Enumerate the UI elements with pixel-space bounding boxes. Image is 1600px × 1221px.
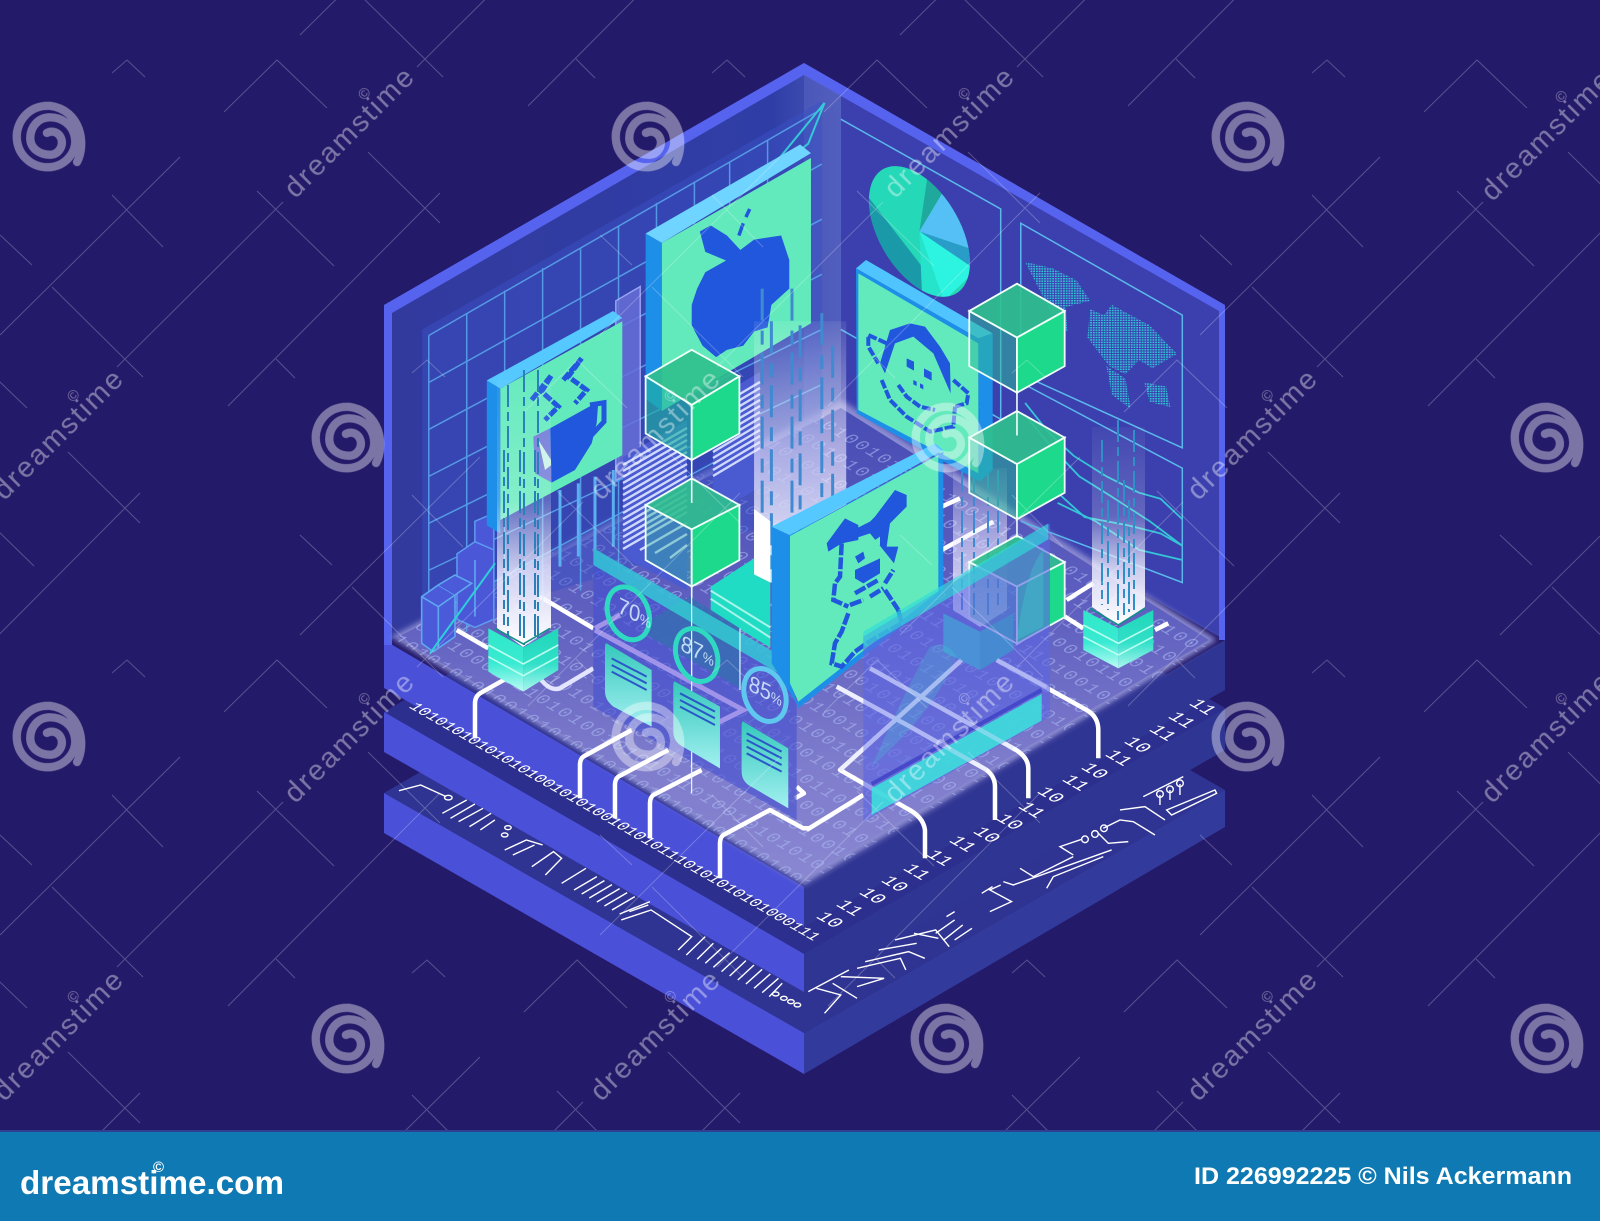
wall rim	[384, 63, 1225, 645]
floor binary text	[398, 415, 1206, 885]
floor binary text: 0100101001010100101101001010010101001010	[650, 477, 1106, 751]
layer: binary slab	[384, 465, 1225, 992]
right data pillar	[1092, 420, 1145, 625]
monkey screen	[856, 260, 993, 482]
binary text on slab right strip: 11	[920, 847, 959, 869]
gauge labels: 85%	[747, 670, 785, 712]
floor binary text: 1010100101011010010101001010101101001010	[474, 581, 930, 855]
icon: apple	[692, 209, 789, 357]
floor binary text: 0101010010101101001010010101010010110101	[562, 529, 1018, 803]
floor binary text: 1001010100101001010110100101010010101001	[584, 516, 1040, 790]
cube right middle	[969, 411, 1065, 519]
floor binary text: 0110100101001010100101101001010100101001	[738, 425, 1194, 699]
binary text on slab right strip: 11	[1162, 709, 1201, 731]
binary text on slab right strip: 10	[967, 824, 1006, 846]
binary text on slab right strip: 11	[1099, 747, 1138, 769]
binary text on slab right strip: 11	[1056, 772, 1095, 794]
binary text on slab right strip: 10	[810, 909, 849, 931]
cube right lower	[969, 536, 1065, 644]
left glass panel	[593, 548, 797, 820]
stair bar chart upper	[457, 513, 494, 627]
footer logo mark: ©	[153, 1159, 164, 1176]
binary text on slab right strip	[810, 696, 1222, 931]
gauge labels	[616, 592, 785, 712]
watermark spirals	[17, 106, 1579, 1069]
stair box bar	[422, 560, 495, 653]
layer: circuit slab	[384, 550, 1225, 1074]
right wall	[804, 63, 1225, 640]
icon: coffee cup	[532, 358, 604, 483]
apple data pillar	[754, 289, 846, 582]
binary text on slab right strip: 10	[1118, 734, 1157, 756]
coffee data pillar	[497, 370, 551, 647]
floor binary text: 1010010101101001010010101100101001010100	[760, 412, 1216, 686]
corner band	[804, 75, 841, 440]
cube right top	[969, 284, 1065, 393]
apple screen	[646, 144, 811, 411]
floor binary text: 0010101001101001010100101010011010010101	[694, 451, 1150, 725]
gauge labels: 87%	[679, 630, 717, 672]
gauge rings	[600, 580, 794, 728]
icon: monkey	[868, 323, 968, 432]
world map	[1025, 262, 1177, 409]
white pipes on floor, right side	[807, 498, 1168, 858]
binary text on slab right strip: 11	[943, 833, 982, 855]
floor binary text: 0010100101010110100101001010100101101010	[606, 503, 1062, 777]
cube connector lines	[692, 393, 1017, 685]
right glass panel	[837, 523, 1050, 822]
footer bar	[0, 1130, 1600, 1221]
circuit traces right lower	[808, 885, 1012, 1013]
binary text on slab right strip: 10	[875, 873, 914, 895]
floor binary text: 0010100101010110010100101010011010100101	[782, 399, 1238, 673]
floor binary text: 1010110100101010010100101011010010100101	[628, 490, 1084, 764]
monkey pillar base	[943, 613, 1013, 670]
layer: floor slab	[384, 640, 1225, 927]
left wall	[384, 63, 841, 640]
floor binary text: 0010101001010100101101010010101001010100	[452, 594, 908, 868]
floor	[391, 400, 1217, 885]
line charts	[1025, 403, 1182, 560]
isometric scene	[384, 63, 1238, 1074]
central teal base	[711, 509, 770, 648]
right pillar base	[1083, 608, 1153, 668]
back bar chart stripes	[560, 470, 613, 567]
tall column behind screens	[616, 287, 640, 480]
pie chart	[868, 166, 970, 297]
document cards	[605, 643, 788, 808]
left wall grid panel	[422, 101, 825, 648]
binary text on slab right strip: 11	[897, 861, 936, 883]
binary text on slab right strip: 10	[1075, 760, 1114, 782]
icon: dog	[827, 490, 907, 667]
cube left upper	[646, 350, 739, 460]
coffee pillar base	[488, 628, 558, 692]
binary text on slab left strip: 1010101010101010010101001010101110101010101000111	[404, 700, 825, 944]
binary text on slab right strip: 11	[830, 897, 869, 919]
zoom-1 coordinate layer: walls and objects	[422, 101, 1182, 648]
cube left lower	[646, 478, 739, 587]
zoom-1 coordinate layer: cubes	[646, 284, 1065, 685]
white pipes on floor, left side	[457, 597, 810, 878]
monkey data pillar	[953, 468, 1007, 627]
footer credit: ID 226992225 © Nils Ackermann	[1194, 1163, 1572, 1190]
right wall panels	[841, 119, 1182, 582]
dog screen	[772, 443, 943, 708]
footer logo: dreamstime.com	[20, 1164, 284, 1201]
floor binary text: 0100101010010101001010110100101010010101	[496, 568, 952, 842]
binary text on slab right strip: 11	[1012, 799, 1051, 821]
binary text on slab right strip: 11	[1143, 722, 1182, 744]
floor binary text: 1011010010100101010010110100101010010100	[672, 464, 1128, 738]
striped data table	[623, 372, 760, 590]
binary text on slab right strip: 10	[1031, 784, 1070, 806]
floor binary text: 1010101001010010101101010100101001010101	[518, 555, 974, 829]
coffee screen	[487, 311, 622, 534]
floor binary text: 1101001010100101001010101001011010100101	[540, 542, 996, 816]
binary text on slab right strip: 10	[990, 811, 1029, 833]
floor binary text: 1001010010101011010010100101010010110100	[716, 438, 1172, 712]
floor binary text: 1010010100101010100101001010110101001010	[430, 607, 886, 881]
binary text on slab right strip: 11	[1183, 696, 1222, 718]
circuit traces right upper	[1003, 777, 1217, 888]
binary text on slab right strip: 10	[853, 885, 892, 907]
floor binary text: 0101000101101010010101011010010101010100	[408, 620, 864, 894]
floor binary text: 1010101010010101001011010101001010100101	[386, 633, 842, 907]
circuit traces left	[399, 785, 801, 1007]
gauge labels: 70%	[616, 592, 654, 634]
zoom-2 coordinate layer: circuit traces	[399, 785, 1012, 1013]
